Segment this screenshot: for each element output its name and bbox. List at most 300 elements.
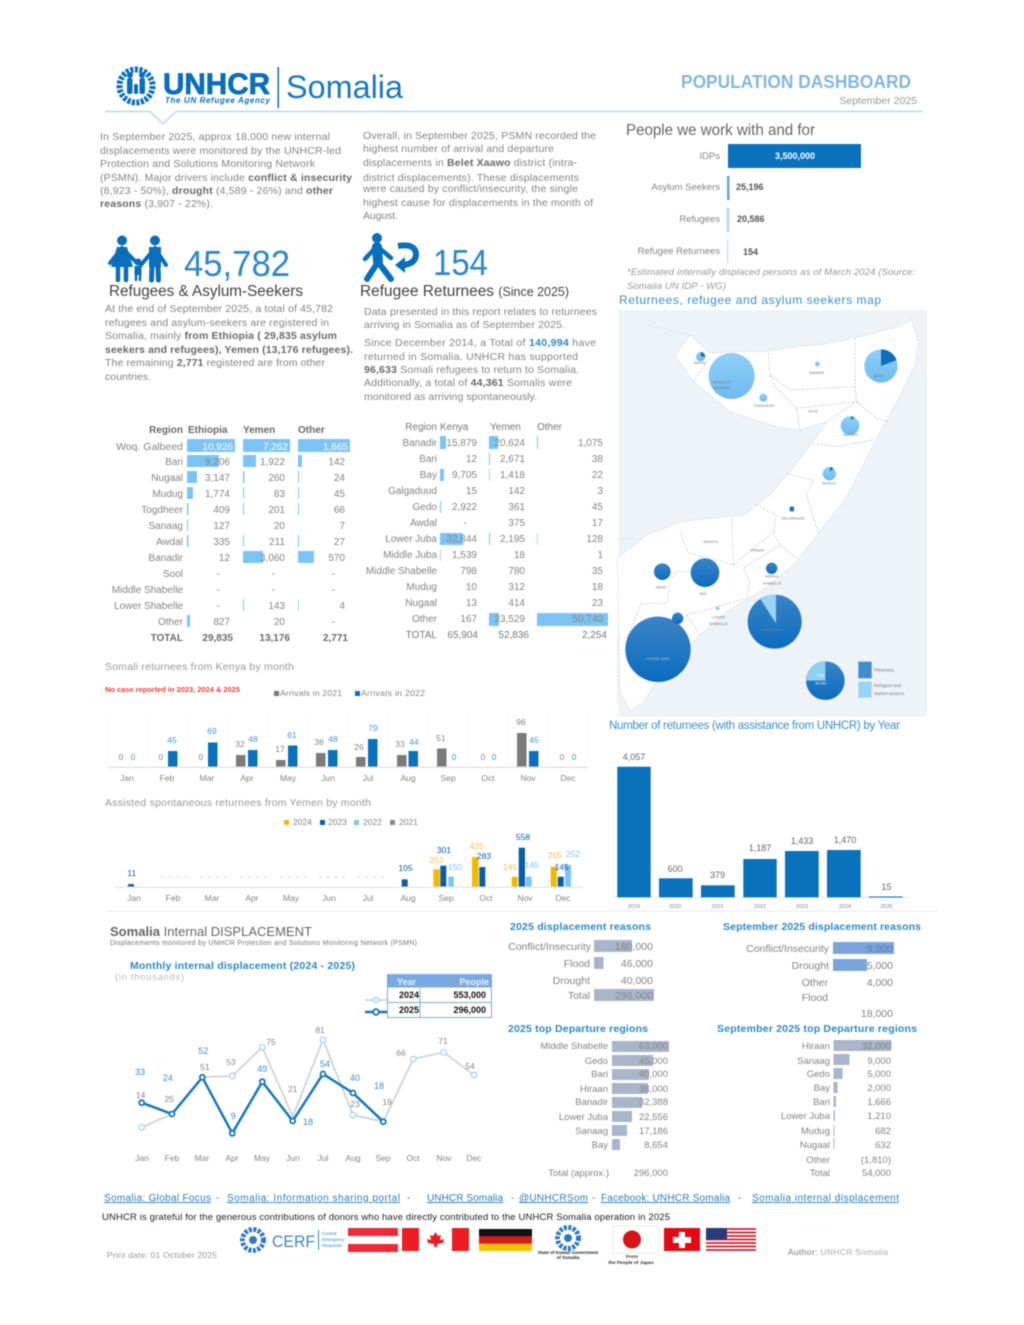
- table rows: 780: [508, 566, 525, 577]
- bars: [612, 1041, 669, 1150]
- rows: 8,654: [644, 1140, 668, 1151]
- table rows: -: [464, 518, 467, 529]
- table rows: -: [217, 585, 220, 596]
- text block: refugees detail: Somalia, mainly from Ethiopia ( 29,835 asylum: [105, 330, 337, 342]
- header rule with notch: [105, 112, 923, 124]
- rows: Flood: [802, 992, 828, 1004]
- footer links: -: [216, 1193, 219, 1204]
- month axis: Jan: [135, 1153, 149, 1163]
- table rows: 12: [466, 454, 477, 465]
- logo wordmark: UNHCR: [163, 68, 270, 101]
- map region labels: SHABELLE: [763, 581, 782, 585]
- month axis: Nov: [517, 893, 533, 903]
- dashboard date: September 2025: [839, 95, 917, 107]
- text block: internal displacement summary: (PSMN). Major drivers include conflict & insecurity: [100, 172, 352, 184]
- table rows: Bari: [419, 454, 437, 465]
- table rows: Gedo: [413, 502, 437, 513]
- footer links: -: [407, 1193, 410, 1204]
- donor acknowledgement: UNHCR is grateful for the generous contributions of donors who have directly contributed to the UNHCR Somalia operation in 2025: [102, 1212, 670, 1223]
- rows: 9,000: [867, 943, 893, 955]
- month axis: Nov: [436, 1153, 452, 1163]
- rows: Middle Shabelle: [540, 1041, 608, 1052]
- text block: returnees detail: Since December 2014, a Total of 140,994 have: [364, 337, 596, 349]
- panel: refugees and asylum seekers headline: [105, 236, 353, 383]
- rows: [781, 1041, 891, 1179]
- logo wordmark: The UN Refugee Agency: [165, 96, 271, 105]
- year axis: 2023: [796, 904, 808, 910]
- author: Author: UNHCR Somalia: [788, 1247, 888, 1257]
- text block: PSMN overview: were caused by conflict/insecurity, the single: [362, 183, 578, 195]
- table rows: Middle Shabelle: [366, 566, 437, 577]
- text block: internal displacement summary: reasons (3,907 - 22%).: [100, 198, 213, 210]
- heading: returnees: Refugee Returnees (Since 2025): [360, 283, 569, 300]
- rows: Other: [802, 977, 828, 989]
- bar: asylum seekers: 25,196: [736, 182, 764, 192]
- point labels: 2024: 54: [465, 1061, 475, 1071]
- rows: Flood: [564, 958, 590, 970]
- table rows: 570: [328, 553, 345, 564]
- rows: 40,000: [639, 1069, 668, 1080]
- flag: United States: [706, 1228, 756, 1250]
- text block: returnees detail: arriving in Somalia as of September 2025.: [364, 319, 565, 331]
- logo: CERF: Emergency: [322, 1237, 346, 1242]
- rows: 54,000: [862, 1168, 891, 1179]
- month axis: Oct: [481, 773, 495, 783]
- section heading: internal displacement: Displacements monitored by UNHCR Protection and Solutions Monitoring Network (PSMN): [110, 940, 417, 947]
- table rows: Mudug: [152, 489, 183, 500]
- map region labels: MUDUG: [822, 481, 836, 485]
- bar value labels: 48: [248, 734, 258, 744]
- flag: Germany: [479, 1229, 532, 1251]
- logo: CERF: Response: [322, 1243, 343, 1248]
- bar: refugees: Refugees: [679, 214, 720, 225]
- bar value labels: 26: [354, 742, 364, 752]
- bar value labels: 17: [275, 744, 285, 754]
- big number: refugees: 45,782: [184, 243, 290, 284]
- month axis: Jul: [363, 773, 374, 783]
- table rows: 211: [269, 537, 285, 548]
- map region labels: TOGDHEER: [754, 404, 775, 408]
- table rows: Banadir: [403, 438, 438, 449]
- donor logos: [242, 1226, 756, 1266]
- month axis: Apr: [240, 773, 254, 783]
- placeholder dashes: [162, 876, 384, 878]
- bar value labels: 600: [667, 864, 683, 874]
- rows: 296,000: [634, 1168, 668, 1179]
- table rows: [366, 438, 607, 641]
- heading: refugees: Refugees & Asylum-Seekers: [109, 283, 303, 300]
- bar value labels: 96: [516, 717, 526, 727]
- logo: CERF: [242, 1230, 346, 1251]
- chart: assisted spontaneous returnees from Yemen: [105, 797, 583, 903]
- footnote: Somalia UN IDP - WG): [627, 281, 726, 292]
- table rows: 15,879: [446, 438, 477, 449]
- table header: [149, 425, 325, 436]
- rows: Drought: [553, 975, 590, 987]
- text block: PSMN overview: Overall, in September 2025, PSMN recorded the: [363, 130, 596, 142]
- footer links: Somalia: Information sharing portal: [227, 1193, 400, 1204]
- logo: government of Kuwait emblem: State of Kuwait Government: [538, 1250, 599, 1255]
- bar value labels: 145: [503, 862, 517, 872]
- map region labels: BANADIR: [764, 628, 781, 632]
- point labels: 2025: 54: [320, 1059, 330, 1069]
- table rows: 7: [339, 521, 345, 532]
- panel: September 2025 top departure regions: [717, 1023, 917, 1179]
- rows: 9,000: [867, 1056, 891, 1067]
- table rows: 1,774: [205, 489, 230, 500]
- footer links: Somalia internal displacement: [752, 1193, 899, 1204]
- text block: refugees detail: At the end of September 2025, a total of 45,782: [105, 303, 333, 315]
- month axis: Jan: [127, 893, 141, 903]
- bars: [594, 940, 654, 1001]
- section heading: internal displacement: [110, 924, 417, 947]
- table rows: 414: [508, 598, 525, 609]
- rows: 18,000: [861, 1008, 893, 1020]
- map region labels: HIRAAN: [750, 548, 765, 552]
- bar: refugees: [679, 208, 765, 232]
- table rows: Middle Shabelle: [112, 585, 183, 596]
- line: 2025: [139, 1072, 386, 1136]
- month axis: May: [280, 773, 297, 783]
- chart legend: 2021: [399, 817, 418, 827]
- country name: Somalia: [286, 69, 403, 105]
- table rows: 38: [592, 454, 603, 465]
- table rows: 52,836: [498, 630, 529, 641]
- table rows: 167: [460, 614, 477, 625]
- table rows: Lower Juba: [385, 534, 437, 545]
- table rows: 23: [592, 598, 603, 609]
- rows: 17,186: [639, 1126, 668, 1137]
- chart legend: [274, 688, 425, 698]
- table rows: 13: [466, 598, 477, 609]
- flag: Austria: [348, 1228, 398, 1252]
- month axis: Aug: [400, 773, 416, 783]
- map region labels: LOWER JUBA: [646, 657, 670, 661]
- table rows: 1: [597, 550, 603, 561]
- point labels: 2024: 23: [350, 1099, 360, 1109]
- chart: returnees by year: [609, 720, 908, 910]
- month axis: Jun: [286, 1153, 300, 1163]
- text block: internal displacement summary: [100, 131, 352, 210]
- month axis: May: [283, 893, 300, 903]
- point labels: 2025: 24: [163, 1073, 173, 1083]
- table rows: 66: [334, 505, 345, 516]
- table rows: 798: [460, 566, 477, 577]
- flag: Japan: the People of Japan: [608, 1260, 654, 1266]
- rows: 5,000: [867, 1069, 891, 1080]
- dashboard title: POPULATION DASHBOARD: [681, 72, 911, 92]
- rows: Bay: [814, 1083, 830, 1094]
- bar value labels: 0: [572, 752, 577, 762]
- table rows: 2,254: [582, 630, 607, 641]
- table rows: TOTAL: [406, 630, 437, 641]
- footnote: *Estimated internally displaced persons as of March 2024 (Source:: [627, 267, 915, 278]
- logo: CERF: CERF: [272, 1232, 315, 1251]
- table rows: -: [272, 569, 275, 580]
- table rows: 12: [219, 553, 230, 564]
- icon: family: [110, 236, 166, 280]
- bar: asylum seekers: [651, 176, 764, 200]
- bar value labels: 145: [525, 860, 539, 870]
- point labels: 2024: 19: [382, 1097, 392, 1107]
- bar: refugees: 20,586: [737, 214, 765, 224]
- rows: 38,000: [639, 1084, 668, 1095]
- rows: Drought: [792, 960, 829, 972]
- print date: Print date: 01 October 2025: [107, 1250, 217, 1260]
- table rows: 1,075: [578, 438, 603, 449]
- table rows: Bay: [420, 470, 437, 481]
- point labels: 2024: 66: [396, 1048, 406, 1058]
- bar value labels: [623, 752, 892, 892]
- bar value labels: 0: [119, 752, 124, 762]
- year axis: 2025: [880, 904, 893, 910]
- table header: [405, 422, 563, 433]
- rows: Hiraan: [580, 1084, 608, 1095]
- table header: Ethiopia: [188, 425, 228, 436]
- table rows: Togdheer: [141, 505, 184, 516]
- table rows: -: [217, 569, 220, 580]
- point labels: 2025: [135, 1046, 384, 1127]
- table rows: Nugaal: [151, 473, 183, 484]
- chart title: Number of returnees (with assistance from UNHCR) by Year: [609, 720, 900, 732]
- point labels: 2025: 33: [135, 1067, 145, 1077]
- map legend: [806, 661, 904, 700]
- yellow bars: 2024: [433, 857, 557, 886]
- rows: Gedo: [807, 1069, 830, 1080]
- header: logo and title: [105, 67, 923, 124]
- rows: Sanaag: [797, 1056, 830, 1067]
- chart: monthly internal displacement: [115, 960, 492, 1163]
- table rows: 50,740: [572, 614, 603, 625]
- table rows: Mudug: [406, 582, 437, 593]
- rows: 1,210: [867, 1111, 891, 1122]
- totals table: 553,000: [453, 990, 486, 1000]
- table rows: TOTAL: [151, 633, 183, 644]
- map region labels: [646, 361, 883, 661]
- point labels: 2024: 75: [266, 1037, 276, 1047]
- bar value labels: 0: [452, 752, 457, 762]
- month axis: Dec: [555, 893, 571, 903]
- month axis: May: [254, 1153, 271, 1163]
- rows: 4,000: [867, 977, 893, 989]
- point labels: 2024: 71: [438, 1036, 448, 1046]
- table rows: 10: [466, 582, 477, 593]
- table rows: 1,665: [323, 442, 348, 453]
- table rows: 29,835: [202, 633, 233, 644]
- heading: September 2025 displacement reasons: [723, 921, 921, 933]
- year axis: 2020: [669, 904, 681, 910]
- heading: 2025 top Departure regions: [508, 1023, 648, 1035]
- month axis: Feb: [165, 1153, 180, 1163]
- table rows: 201: [268, 505, 285, 516]
- table rows: Awdal: [410, 518, 437, 529]
- map region labels: GALBEED: [713, 386, 731, 390]
- table rows: 45: [334, 489, 345, 500]
- chart title: Assisted spontaneous returnees from Yemen by month: [105, 797, 371, 809]
- month axis: Aug: [345, 1153, 361, 1163]
- year axis: 2022: [754, 904, 766, 910]
- table rows: 127: [213, 521, 230, 532]
- table header: Kenya: [440, 422, 469, 433]
- map legend: Returnees: [874, 668, 894, 673]
- map legend: asylum seekers: [874, 691, 904, 696]
- bars: [833, 942, 894, 971]
- point labels: 2024: 51: [200, 1062, 210, 1072]
- point labels: 2024: 14: [136, 1090, 146, 1100]
- table rows: Other: [412, 614, 438, 625]
- table rows: Sanaag: [149, 521, 183, 532]
- map region labels: AWDAL: [694, 361, 706, 365]
- blue bars: 2023: [128, 848, 564, 886]
- bars: 2021 arrivals: [236, 733, 526, 766]
- table bars: [440, 436, 608, 626]
- map legend: 45,782: [815, 682, 826, 686]
- table: returnees by region: [366, 422, 608, 641]
- flag: Japan: [608, 1226, 659, 1266]
- rows: 22,556: [639, 1112, 668, 1123]
- footer links: -: [511, 1193, 514, 1204]
- bar value labels: 45: [167, 735, 177, 745]
- table header: Other: [537, 422, 563, 433]
- totals table: 2025: [399, 1005, 419, 1015]
- flag: Switzerland: [664, 1228, 700, 1251]
- bar value labels: 0: [492, 752, 497, 762]
- table rows: 23,529: [494, 614, 525, 625]
- bar value labels: 0: [199, 752, 204, 762]
- map region labels: MIDDLE: [670, 627, 684, 631]
- rows: Sanaag: [575, 1126, 608, 1137]
- bar value labels: 379: [710, 870, 725, 880]
- table rows: 45: [592, 502, 603, 513]
- table rows: 1,922: [260, 457, 285, 468]
- light bars: 2022: [448, 865, 571, 886]
- text block: PSMN overview: highest number of arrival and departure: [363, 143, 554, 155]
- totals table: Year: [397, 977, 416, 987]
- rows: 682: [875, 1126, 891, 1137]
- panel: people we work with and for: [626, 122, 915, 292]
- logo: government of Kuwait emblem: [538, 1228, 599, 1260]
- table rows: Bari: [165, 457, 183, 468]
- text block: refugees detail: refugees and asylum-seekers are registered in: [105, 317, 329, 329]
- point labels: 2025: 18: [303, 1117, 313, 1127]
- table rows: Other: [158, 617, 184, 628]
- table rows: Sool: [163, 569, 183, 580]
- rows: Conflict/Insecurity: [746, 943, 830, 955]
- text block: PSMN overview: highest cause for displacements in the month of: [363, 197, 593, 209]
- month axis: [120, 773, 576, 783]
- rows: Banadir: [575, 1097, 608, 1108]
- table: refugees and asylum seekers by region: [112, 425, 350, 644]
- table rows: 260: [268, 473, 285, 484]
- table rows: -: [332, 617, 335, 628]
- rows: Conflict/Insecurity: [508, 941, 592, 953]
- text block: returnees detail: Additionally, a total of 44,361 Somalis were: [364, 377, 572, 389]
- table rows: 2,671: [500, 454, 525, 465]
- text block: refugees detail: seekers and refugees), Yemen (13,176 refugees).: [105, 344, 353, 356]
- table header: Yemen: [490, 422, 521, 433]
- footer links: UNHCR Somalia: [427, 1193, 503, 1204]
- rows: Other: [806, 1155, 830, 1166]
- table rows: 3,060: [260, 553, 285, 564]
- table rows: 65,904: [447, 630, 478, 641]
- table rows: 83: [274, 489, 285, 500]
- map bubbles: [625, 349, 898, 682]
- month axis: [135, 1153, 482, 1163]
- table rows: 22: [592, 470, 603, 481]
- totals table: 296,000: [453, 1005, 486, 1015]
- text block: returnees detail: Data presented in this report relates to returnees: [364, 306, 597, 318]
- table header: Region: [149, 425, 183, 436]
- bars: 2022 arrivals: [168, 739, 538, 766]
- bar value labels: 1,187: [749, 843, 771, 853]
- big number: returnees: 154: [433, 242, 488, 283]
- totals table: 2024: [399, 990, 419, 1000]
- rows: Lower Juba: [781, 1111, 831, 1122]
- bar value labels: 4,057: [623, 752, 645, 762]
- point labels: 2024: 81: [315, 1025, 325, 1035]
- text block: returnees detail: returned in Somalia. UNHCR has supported: [364, 351, 578, 363]
- rows: 40,000: [621, 975, 653, 987]
- year axis: 2021: [711, 904, 724, 910]
- month axis: Apr: [245, 893, 259, 903]
- rows: Bari: [591, 1069, 608, 1080]
- rows: 2,000: [867, 1083, 891, 1094]
- footer links: -: [592, 1193, 595, 1204]
- month axis: [127, 893, 571, 903]
- map legend: Total: [817, 674, 825, 678]
- text block: internal displacement summary: In September 2025, approx 18,000 new internal: [100, 131, 330, 143]
- heading: 2025 displacement reasons: [510, 921, 651, 933]
- chart legend: 2024: [293, 817, 312, 827]
- month axis: Mar: [195, 1153, 209, 1163]
- bar value labels: 283: [477, 851, 491, 861]
- table rows: 1,539: [452, 550, 477, 561]
- chart legend: 2022: [363, 817, 382, 827]
- logo: government of Kuwait emblem: of Somalia: [557, 1255, 580, 1260]
- table header: Region: [405, 422, 437, 433]
- unit note: (in thousands): [115, 972, 184, 983]
- table rows: 143: [268, 601, 285, 612]
- chart title: Somali returnees from Kenya by month: [105, 661, 294, 673]
- bar: refugee returnees: 154: [743, 247, 758, 257]
- panel: returnees map: [617, 310, 927, 717]
- table rows: 27: [334, 537, 345, 548]
- month axis: Dec: [560, 773, 576, 783]
- table rows: 32,844: [446, 534, 477, 545]
- table rows: 13,176: [259, 633, 290, 644]
- flag: Canada: [402, 1228, 469, 1251]
- bar value labels: 145: [555, 862, 569, 872]
- text block: internal displacement summary: displacements were monitored by the UNHCR-led: [100, 145, 341, 157]
- logo: CERF: Central: [322, 1231, 337, 1236]
- table rows: Woq. Galbeed: [116, 441, 183, 453]
- icon: returning person: [365, 233, 416, 279]
- table rows: 7,262: [263, 442, 288, 453]
- year axis: [628, 904, 893, 910]
- chart legend: Arrivals in 2022: [361, 688, 425, 698]
- point labels: 2025: 18: [374, 1081, 384, 1091]
- table rows: 312: [508, 582, 525, 593]
- bar value labels: 11: [127, 868, 136, 878]
- table rows: 827: [213, 617, 230, 628]
- table rows: 35: [592, 566, 603, 577]
- point labels: 2025: 52: [198, 1046, 208, 1056]
- bar value labels: 425: [470, 841, 484, 851]
- point labels: 2024: 25: [165, 1094, 174, 1104]
- month axis: Jul: [318, 1153, 329, 1163]
- rows: 45,000: [639, 1056, 668, 1067]
- table rows: Banadir: [149, 553, 184, 564]
